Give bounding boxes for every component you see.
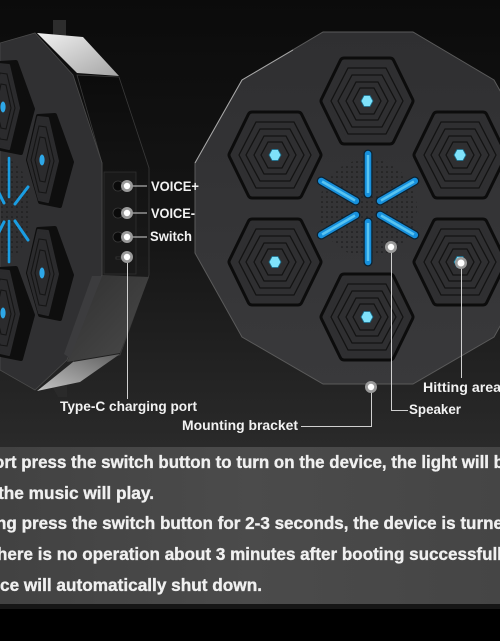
panel bottom shadow <box>0 604 500 609</box>
leader lines and markers <box>121 180 467 426</box>
device front view <box>195 32 500 384</box>
side blue light bars <box>0 158 28 262</box>
blue light bars <box>321 154 415 262</box>
hit pad left lower <box>233 223 317 301</box>
label Type-C charging port: Type-C charging port <box>60 398 197 414</box>
device side body <box>73 75 149 363</box>
bottom mounting bracket <box>52 384 67 397</box>
hit pad right lower <box>418 223 500 301</box>
face bevel <box>64 276 102 358</box>
label VOICE-: VOICE- <box>151 205 195 221</box>
side hit pad upper right <box>28 115 72 206</box>
instructions panel <box>0 447 500 609</box>
instruction text: the music will play. <box>0 483 154 503</box>
side buttons <box>113 181 123 259</box>
label Mounting bracket: Mounting bracket <box>182 417 298 433</box>
bottom light surface <box>37 354 120 391</box>
marker mounting bracket <box>365 381 377 393</box>
hit pad bottom <box>325 278 409 356</box>
side hit pad lower right <box>28 228 72 319</box>
side hit pad lower left <box>0 268 33 359</box>
marker hitting area <box>455 257 467 269</box>
device side view <box>0 20 149 397</box>
hit pad left upper <box>233 116 317 194</box>
hit pad top <box>325 62 409 140</box>
side hit pad upper left <box>0 62 33 153</box>
front body <box>195 32 500 384</box>
hit pad right upper <box>418 116 500 194</box>
marker VOICE- <box>121 207 133 219</box>
callout labels <box>60 178 500 433</box>
instruction text <box>0 452 500 595</box>
label Speaker: Speaker <box>409 401 462 417</box>
top mounting bracket <box>53 20 66 36</box>
panel background <box>0 447 500 604</box>
marker VOICE+ <box>121 180 133 192</box>
label VOICE+: VOICE+ <box>151 178 199 194</box>
marker speaker <box>385 241 397 253</box>
lower side surface <box>67 275 149 362</box>
label Hitting area: Hitting area <box>423 379 500 395</box>
label Switch: Switch <box>150 228 192 244</box>
leader lines <box>127 186 462 426</box>
side speaker dots <box>0 161 30 257</box>
device front face <box>0 33 102 390</box>
marker Switch <box>121 231 133 243</box>
top light surface <box>37 33 119 76</box>
top edge highlight <box>195 50 293 163</box>
marker Type-C <box>121 251 133 263</box>
button panel <box>104 172 136 274</box>
instruction text: ce will automatically shut down. <box>0 575 262 595</box>
dark background <box>0 0 500 447</box>
speaker dots <box>319 159 417 257</box>
